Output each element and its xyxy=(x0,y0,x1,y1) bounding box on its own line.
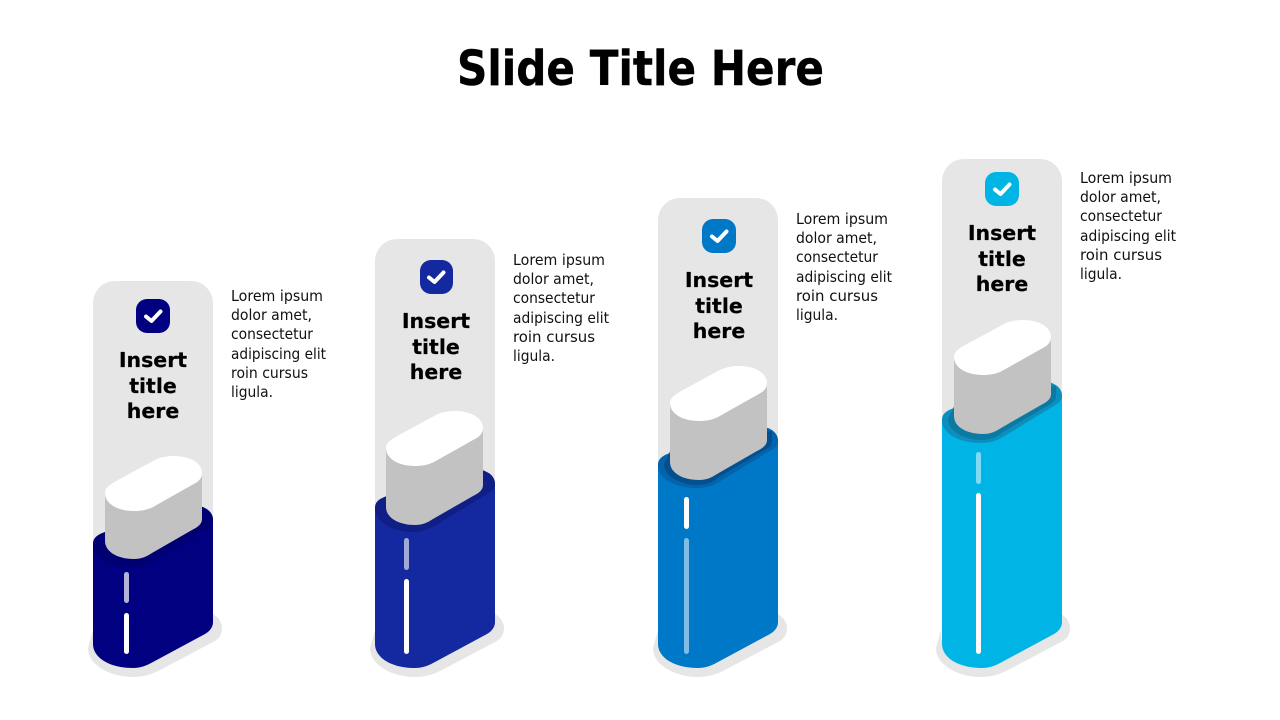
description 2: Lorem ipsum xyxy=(513,251,605,269)
bar rim inner 4 xyxy=(948,386,1056,440)
panel: step 1 xyxy=(88,281,326,677)
description 1: adipiscing elit xyxy=(231,345,326,363)
cap 1 xyxy=(105,456,202,559)
bar rim inner 3 xyxy=(664,431,772,485)
bar rim 4 xyxy=(942,381,1062,443)
description 3: roin cursus xyxy=(796,287,878,305)
card title 2: here xyxy=(410,360,462,384)
cap 4 xyxy=(954,320,1051,434)
icon: check badge 1 xyxy=(136,299,170,333)
card title 3: title xyxy=(695,294,743,318)
icon: check badge 2 xyxy=(420,260,453,294)
description 4: consectetur xyxy=(1080,207,1163,225)
cap 2 xyxy=(386,411,483,525)
description 1: Lorem ipsum xyxy=(231,287,323,305)
bar body 4 xyxy=(942,381,1062,668)
level mark faded 4 xyxy=(976,452,981,484)
description 3: ligula. xyxy=(796,306,838,324)
card title 1: title xyxy=(129,374,177,398)
bar body 1 xyxy=(93,505,213,668)
description 2: roin cursus xyxy=(513,328,595,346)
description 1: consectetur xyxy=(231,325,314,343)
title: Slide Title Here xyxy=(457,41,824,97)
grey card 4 xyxy=(942,159,1062,479)
description 1: ligula. xyxy=(231,383,273,401)
floor shadow 1 xyxy=(88,614,222,677)
description 4: ligula. xyxy=(1080,265,1122,283)
bar rim 1 xyxy=(93,505,213,567)
card title 1: here xyxy=(127,399,179,423)
description 3: consectetur xyxy=(796,248,879,266)
description 1: dolor amet, xyxy=(231,306,312,324)
level mark faded 2 xyxy=(404,538,409,570)
bar rim 2 xyxy=(375,469,495,532)
description 4: adipiscing elit xyxy=(1080,227,1176,245)
description 3: adipiscing elit xyxy=(796,268,892,286)
panel: step 2 xyxy=(370,239,609,677)
grey card 1 xyxy=(93,281,213,601)
level mark solid 1 xyxy=(124,613,129,654)
description 2: consectetur xyxy=(513,289,596,307)
card title 4: title xyxy=(978,247,1026,271)
icon: check badge 3 xyxy=(702,219,736,253)
floor shadow 3 xyxy=(653,614,787,677)
card title 2: title xyxy=(412,335,460,359)
bar body 3 xyxy=(658,426,778,668)
grey card 2 xyxy=(375,239,495,559)
description 2: ligula. xyxy=(513,347,555,365)
level mark faded 1 xyxy=(124,572,129,603)
description 3: Lorem ipsum xyxy=(796,210,888,228)
icon: check badge 4 xyxy=(985,172,1019,206)
panel: step 3 xyxy=(653,198,892,677)
card title 3: here xyxy=(693,319,745,343)
card title 3: Insert xyxy=(685,268,753,292)
level mark faded 3 xyxy=(684,538,689,654)
grey card 3 xyxy=(658,198,778,518)
bar rim 3 xyxy=(658,426,778,488)
description 3: dolor amet, xyxy=(796,229,877,247)
description 2: adipiscing elit xyxy=(513,309,609,327)
panel: step 4 xyxy=(936,159,1176,677)
floor shadow 2 xyxy=(370,614,504,677)
bar body 2 xyxy=(375,469,495,668)
floor shadow 4 xyxy=(936,614,1070,677)
description 4: Lorem ipsum xyxy=(1080,169,1172,187)
description 1: roin cursus xyxy=(231,364,308,382)
card title 4: Insert xyxy=(968,221,1036,245)
description 4: dolor amet, xyxy=(1080,188,1161,206)
card title 4: here xyxy=(976,272,1028,296)
level mark solid 3 xyxy=(684,497,689,529)
card title 2: Insert xyxy=(402,309,470,333)
cap 3 xyxy=(670,366,767,480)
card title 1: Insert xyxy=(119,348,187,372)
level mark solid 2 xyxy=(404,579,409,654)
level mark solid 4 xyxy=(976,493,981,654)
description 2: dolor amet, xyxy=(513,270,594,288)
description 4: roin cursus xyxy=(1080,246,1162,264)
